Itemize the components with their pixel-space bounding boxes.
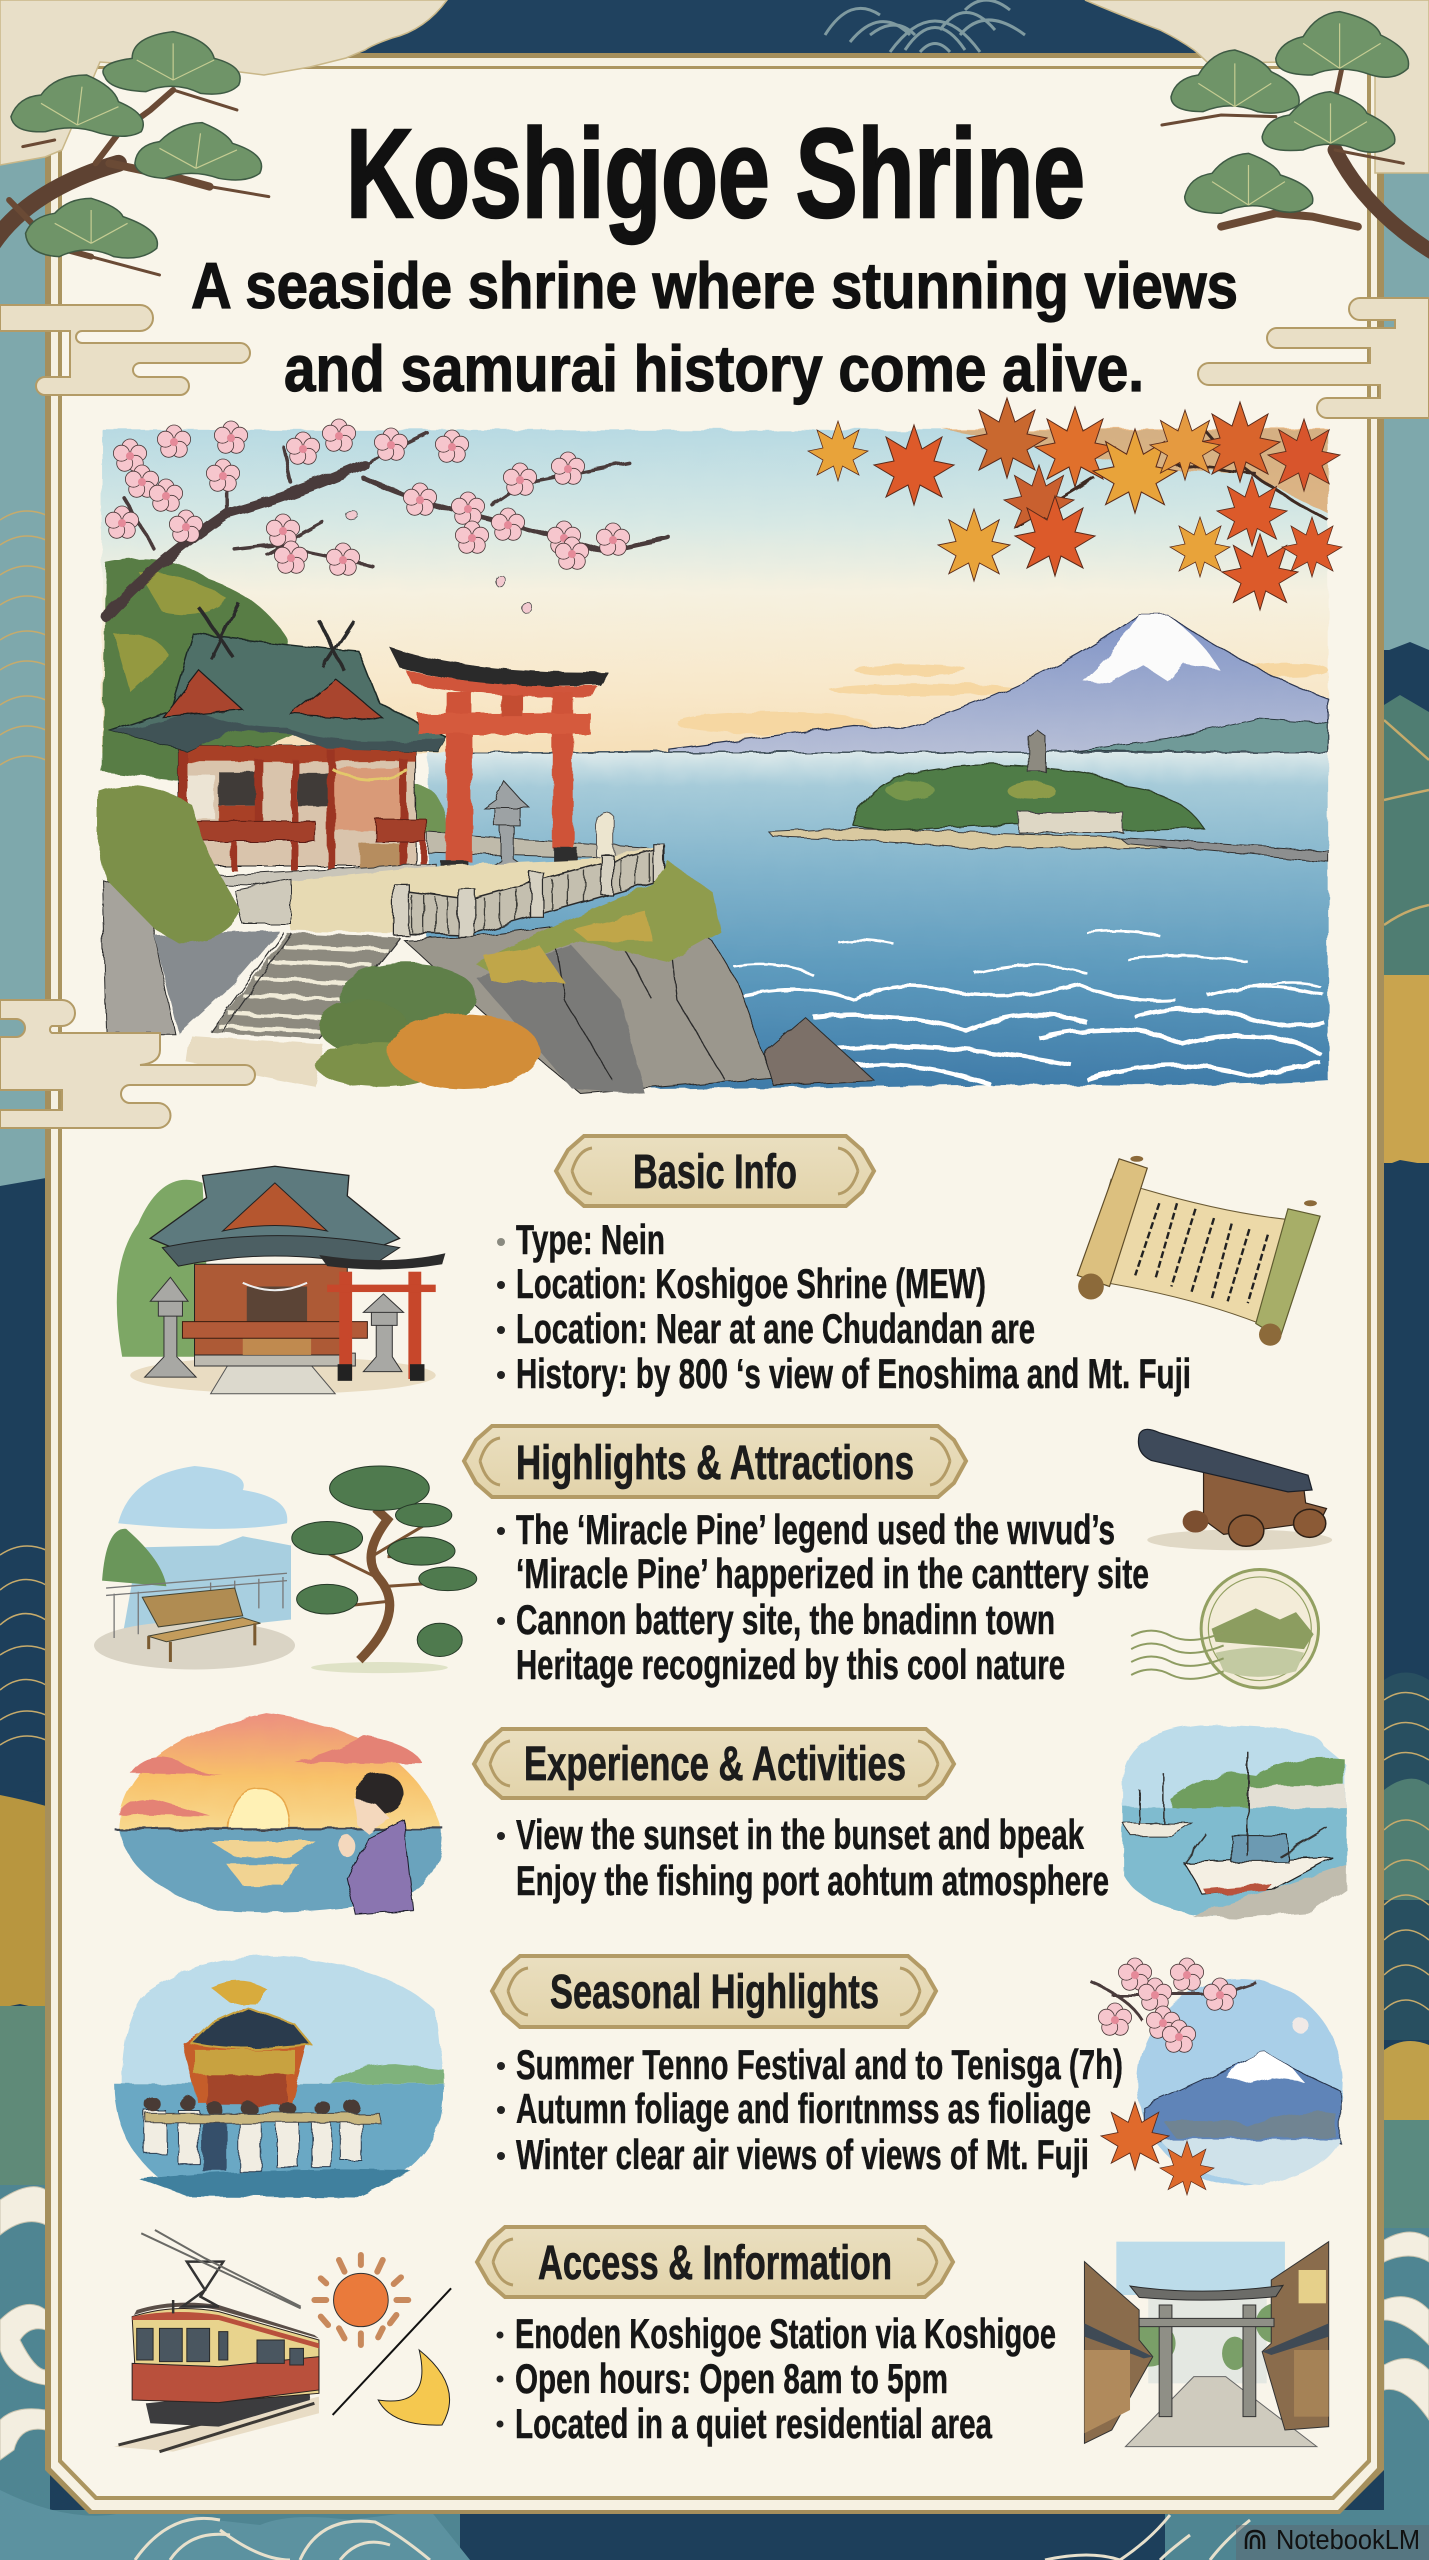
top navy panel with seigaiha arcs xyxy=(340,0,1220,60)
sea waves xyxy=(733,931,1324,1085)
cloud: top right corner xyxy=(1085,0,1429,173)
lanterns xyxy=(145,1277,404,1377)
title: Koshigoe Shrine xyxy=(346,103,1085,244)
section: Seasonal Highlights xyxy=(114,1955,1343,2198)
bullets: Highlights & Attractions: Heritage recognized by this cool nature xyxy=(516,1641,1065,1688)
icon: cannon xyxy=(1138,1429,1332,1550)
icon: day and night xyxy=(314,2255,451,2425)
banner: Highlights & Attractions xyxy=(464,1426,966,1497)
torii xyxy=(327,1272,436,1379)
pine needles xyxy=(41,43,237,243)
banner: Seasonal Highlights: Seasonal Highlights xyxy=(550,1966,879,2019)
roof xyxy=(110,634,445,751)
foliage xyxy=(1171,12,1409,213)
icon: shrine xyxy=(117,1166,445,1394)
right pine tree xyxy=(1162,12,1429,257)
cloud: top left corner xyxy=(0,0,447,165)
bullets: Highlights & Attractions: Cannon battery site, the bnadinn town xyxy=(516,1596,1055,1643)
icon: Mt. Fuji with blossoms and maple xyxy=(1091,1958,1343,2195)
bullets: Highlights & Attractions xyxy=(497,1506,1149,1688)
banner: Basic Info: Basic Info xyxy=(633,1146,797,1199)
cloud: upper left xyxy=(0,305,250,395)
bullets: Basic Info: Type: Nein xyxy=(516,1216,665,1263)
bullets: Seasonal Highlights: Winter clear air views of views of Mt. Fuji xyxy=(516,2131,1089,2178)
sea xyxy=(428,752,1328,1089)
banner: Access & Information: Access & Information xyxy=(538,2237,892,2290)
icon: postage stamp xyxy=(1131,1570,1319,1688)
left bush xyxy=(98,785,241,943)
right edge bands xyxy=(1380,170,1429,2528)
icon: Enoden train xyxy=(114,2230,319,2452)
bullets: Highlights & Attractions: ‘Miracle Pine’ happerized in the canttery site xyxy=(516,1550,1149,1597)
small rock xyxy=(764,1018,874,1085)
left pine tree xyxy=(0,32,269,275)
cherry blossoms xyxy=(105,419,630,575)
trunk and branches xyxy=(0,90,269,275)
bullets: Access & Information: Enoden Koshigoe Station via Koshigoe xyxy=(515,2310,1056,2357)
side waves right xyxy=(1384,2232,1429,2420)
maple wash xyxy=(942,429,1328,514)
cloud: upper right xyxy=(1198,298,1429,418)
icon: sunset and praying woman xyxy=(114,1714,444,1914)
bullets: Access & Information: Open hours: Open 8am to 5pm xyxy=(515,2355,948,2402)
banner: Access & Information xyxy=(477,2227,953,2297)
foreground bushes xyxy=(315,963,540,1089)
subtitle: A seaside shrine where stunning views xyxy=(191,249,1238,322)
icon: mikoshi carried in the sea xyxy=(114,1955,444,2198)
bullets: Access & Information xyxy=(496,2310,1056,2447)
torii gate xyxy=(389,647,609,888)
bullets: Experience & Activities: View the sunset in the bunset and bpeak xyxy=(516,1811,1084,1858)
Enoshima island xyxy=(769,730,1328,862)
bullets: Seasonal Highlights xyxy=(497,2041,1123,2178)
shrine building xyxy=(110,603,445,886)
Mt. Fuji xyxy=(669,615,1328,752)
banner: Highlights & Attractions: Highlights & Attractions xyxy=(516,1437,914,1490)
side waves left xyxy=(0,2187,46,2460)
main cliff xyxy=(404,862,772,1093)
cherry branch xyxy=(106,433,669,616)
section: Experience & Activities xyxy=(114,1714,1346,1918)
pine needles xyxy=(1198,23,1381,205)
section: Access & Information xyxy=(114,2227,1329,2452)
falling petals xyxy=(345,510,532,613)
left edge bands xyxy=(0,150,50,2520)
stairs xyxy=(211,932,400,1039)
sunset clouds xyxy=(677,663,1328,734)
icon: fishing port xyxy=(1123,1725,1346,1918)
trunk and branches xyxy=(1162,70,1429,257)
rear fence xyxy=(428,833,653,859)
maple branch xyxy=(1015,429,1328,527)
bottom waves xyxy=(0,2490,1429,2560)
bullets: Experience & Activities: Enjoy the fishing port aohtum atmosphere xyxy=(516,1857,1109,1904)
sky xyxy=(102,430,1328,753)
subtitle xyxy=(191,249,1238,405)
bullets: Basic Info: Location: Koshigoe Shrine (MEW) xyxy=(516,1260,986,1307)
cloud: lower left xyxy=(0,1000,255,1128)
terrace and fence xyxy=(235,844,665,937)
maple leaves xyxy=(808,398,1342,610)
banner: Basic Info xyxy=(556,1136,874,1206)
bullets: Basic Info xyxy=(497,1216,1191,1397)
hero illustration: seaside shrine with Mt. Fuji xyxy=(98,398,1342,1093)
banner: Experience & Activities xyxy=(474,1729,954,1798)
section: Basic Info xyxy=(117,1136,1320,1397)
section: Highlights & Attractions xyxy=(94,1426,1332,1688)
foliage xyxy=(11,32,262,258)
trees behind shrine xyxy=(102,559,299,781)
stone lantern and post xyxy=(484,781,614,870)
NotebookLM badge xyxy=(1236,2524,1429,2560)
bullets: Highlights & Attractions: The ‘Miracle Pine’ legend used the wıvud’s xyxy=(516,1506,1115,1553)
foreground path xyxy=(186,1035,323,1087)
bullets: Basic Info: Location: Near at ane Chudandan are xyxy=(516,1305,1035,1352)
bullets: Seasonal Highlights: Autumn foliage and fiorıtnmss as fioliage xyxy=(516,2085,1091,2132)
icon: torii street xyxy=(1084,2242,1329,2447)
left rocks xyxy=(102,879,174,1033)
bullets: Seasonal Highlights: Summer Tenno Festival and to Tenisga (7h) xyxy=(516,2041,1123,2088)
banner: Seasonal Highlights xyxy=(492,1956,936,2027)
bullets: Experience & Activities xyxy=(497,1811,1109,1904)
icon: bench by the sea and miracle pine xyxy=(94,1466,477,1673)
banner: Experience & Activities: Experience & Activities xyxy=(524,1738,906,1791)
bullets: Access & Information: Located in a quiet residential area xyxy=(515,2400,992,2447)
icon: scroll xyxy=(1077,1156,1320,1346)
subtitle: and samurai history come alive. xyxy=(284,332,1144,405)
